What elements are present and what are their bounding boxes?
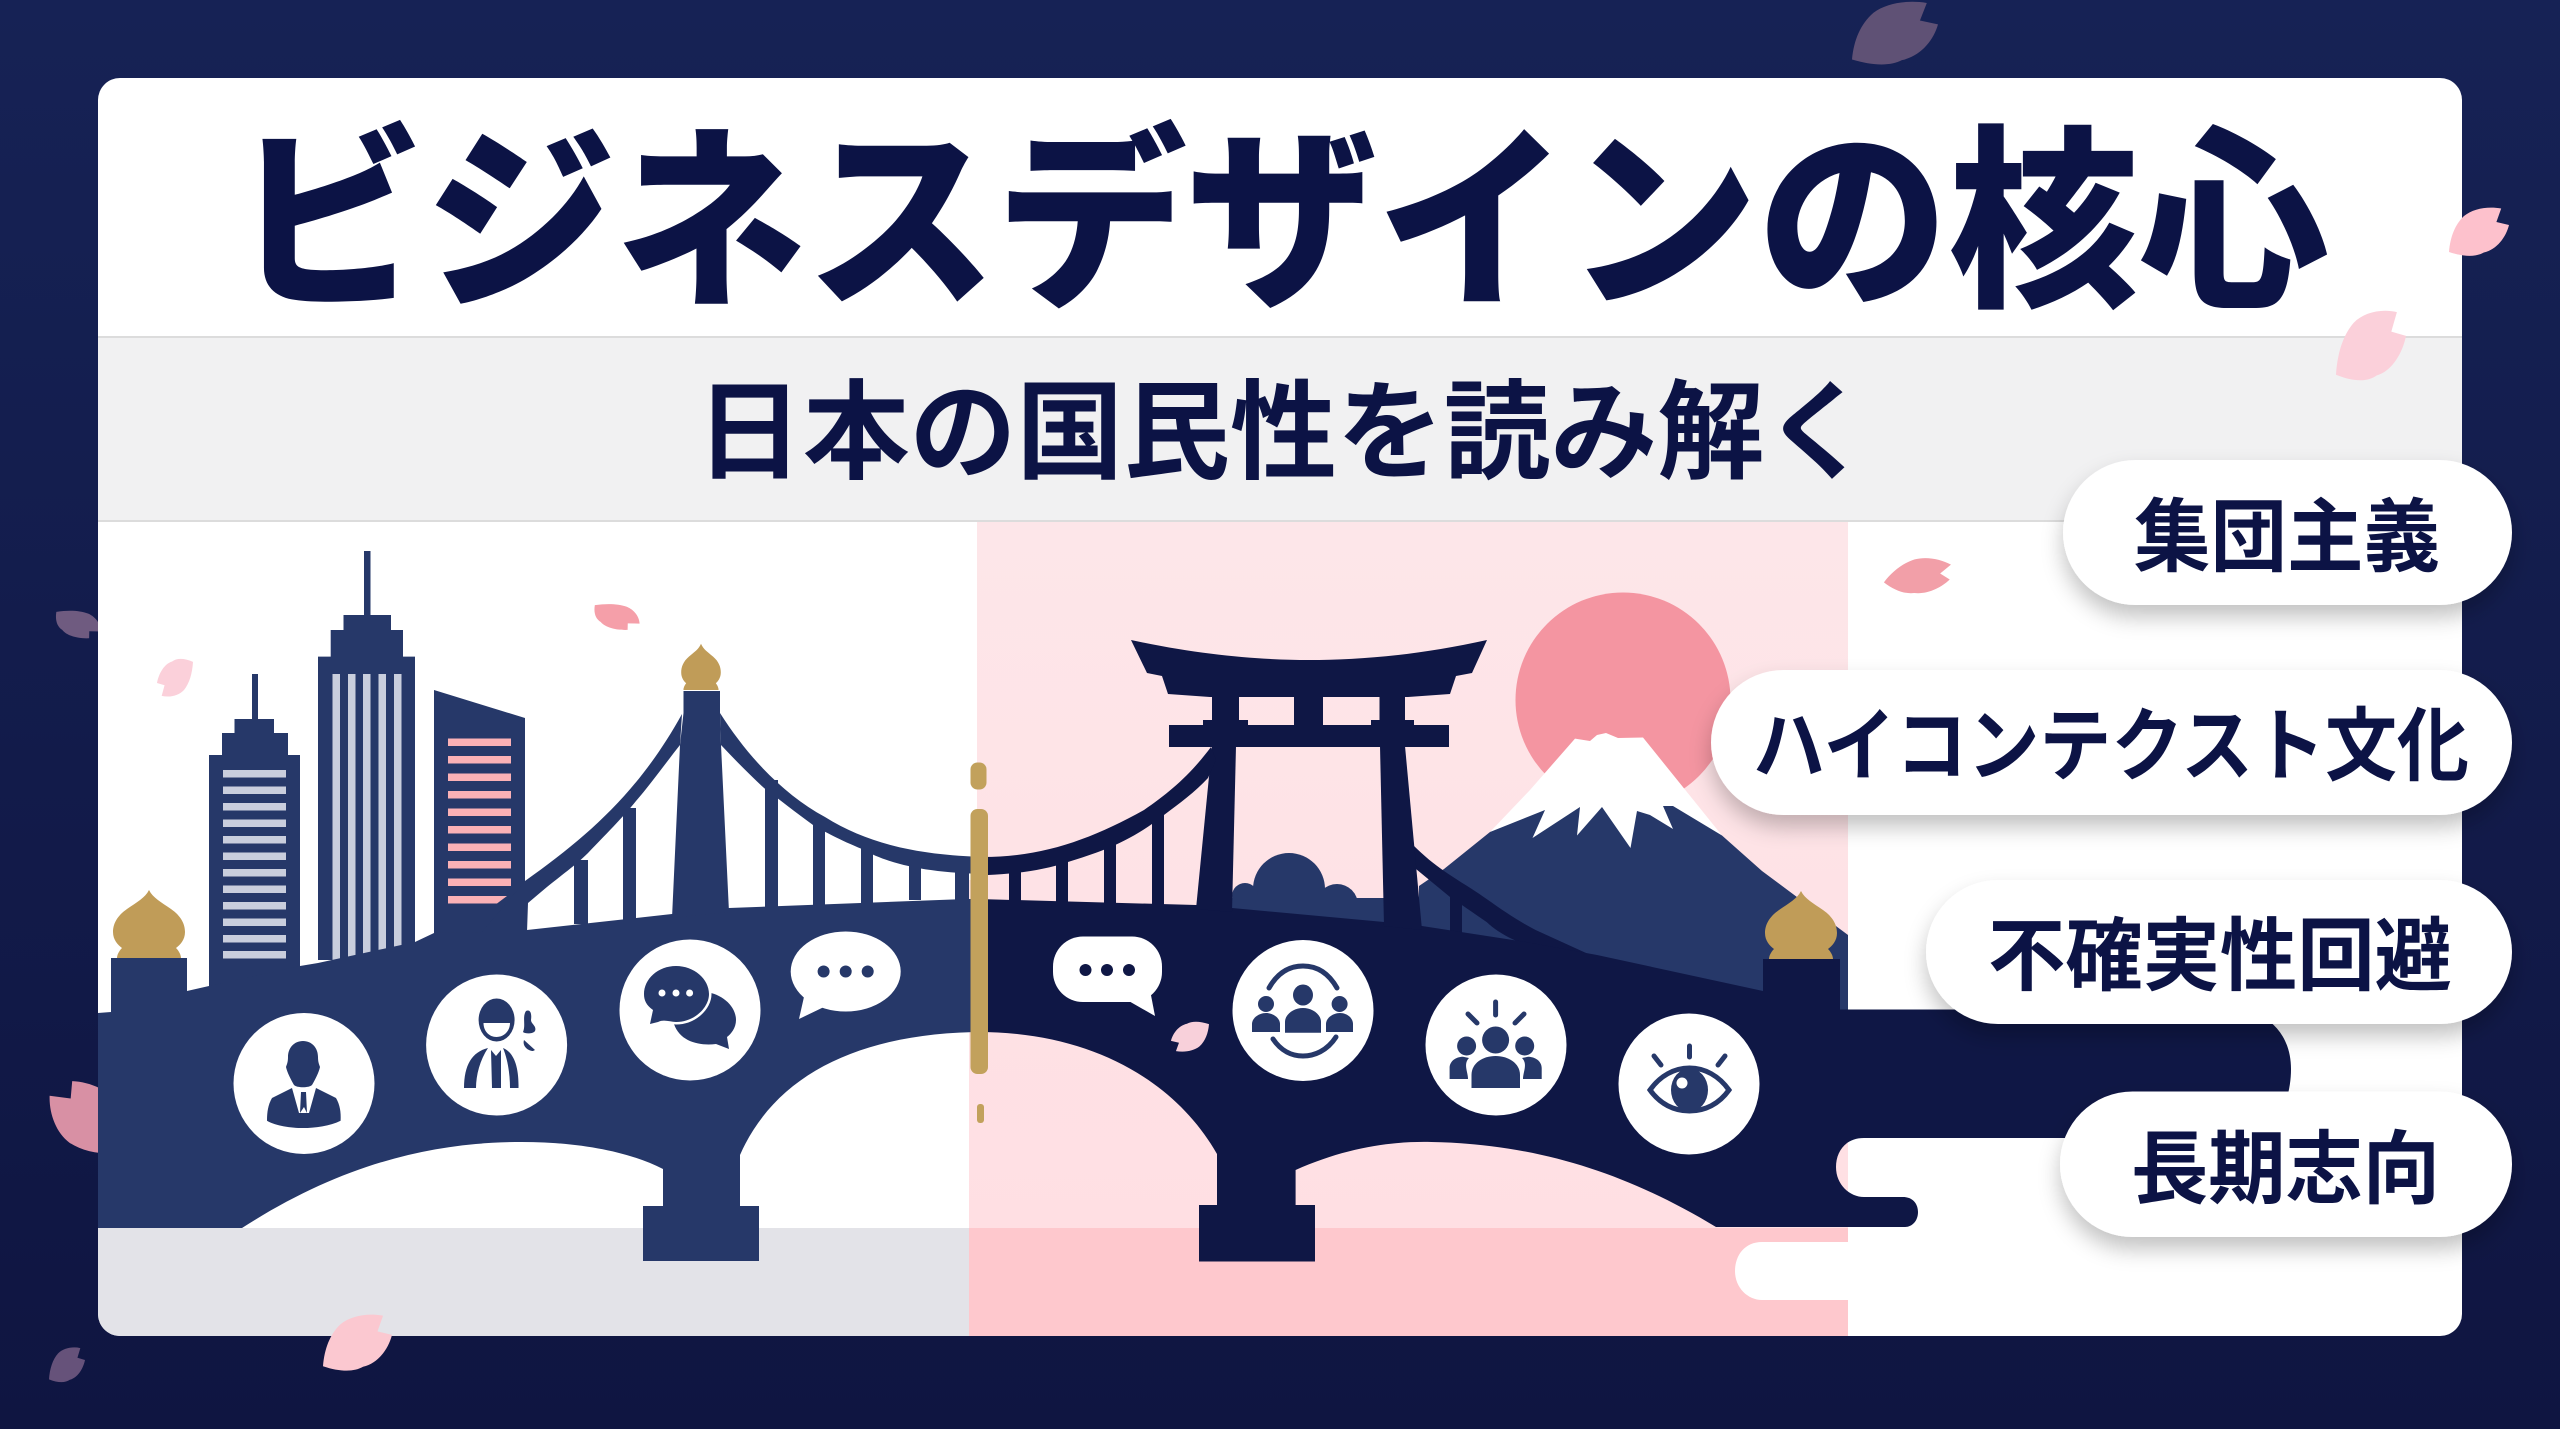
icon: speaking person <box>426 974 567 1116</box>
keyword pill: long-term orientation <box>2060 1092 2512 1237</box>
hangers right <box>1009 815 1164 907</box>
icon: conversation bubbles <box>620 940 760 1080</box>
building: right slanted tower <box>434 690 525 940</box>
keyword pill: uncertainty avoidance <box>1926 880 2512 1024</box>
keyword pill: collectivism <box>2063 460 2512 605</box>
snow cap <box>1490 733 1722 848</box>
icon: group harmony <box>1232 940 1374 1081</box>
main cable right of tower <box>720 713 985 874</box>
building: left tower <box>209 674 300 990</box>
skyline: office towers <box>209 551 525 990</box>
lower right cable <box>1413 845 1597 958</box>
torii gate <box>1131 640 1487 930</box>
building: tall center tower <box>318 551 415 960</box>
icon: business person <box>234 1013 374 1154</box>
pink ground <box>969 1228 1848 1336</box>
pink Japan panel <box>969 522 1848 1228</box>
bridge finials <box>113 644 1837 959</box>
icon: speech bubble left <box>791 932 901 1019</box>
hanger right of torii <box>1450 895 1462 933</box>
illustration panels <box>98 336 2462 1336</box>
icon: speech bubble right <box>1053 936 1162 1016</box>
icon: group attention <box>1426 974 1566 1116</box>
bridge deck right with cloud tail <box>978 899 2291 1262</box>
subtitle: 日本の国民性を読み解く <box>696 372 1871 493</box>
keyword pill: long-term orientation: 長期志向 <box>2131 1125 2440 1214</box>
bridge tower left <box>672 691 729 918</box>
keyword pill: high-context culture <box>1711 670 2512 815</box>
tower finial <box>681 644 721 690</box>
distant trees <box>1232 853 1384 928</box>
mountain body <box>1419 760 1848 1012</box>
grey ground <box>98 1228 969 1336</box>
title: ビジネスデザインの核心 <box>235 114 2329 333</box>
icon: watching eye <box>1618 1014 1760 1154</box>
keyword pill: high-context culture: ハイコンテクスト文化 <box>1753 702 2469 791</box>
bridge deck left <box>98 899 985 1261</box>
main cable left of tower <box>482 714 682 932</box>
petals behind card <box>46 2 1938 1382</box>
mount fuji with sun <box>1419 592 1848 1012</box>
left bridge half <box>98 691 985 1261</box>
gold center seam <box>970 762 988 1123</box>
petals in front <box>157 208 2509 1371</box>
white cloud on ground <box>1735 1242 1850 1300</box>
keyword pill: collectivism: 集団主義 <box>2134 493 2440 582</box>
right bridge half with torii <box>978 640 2291 1262</box>
left pier finial <box>113 890 185 958</box>
keyword pill: uncertainty avoidance: 不確実性回避 <box>1988 912 2452 1001</box>
main cable left of torii <box>978 747 1216 875</box>
right pier finial <box>1765 891 1837 959</box>
subtitle band background <box>98 337 2462 520</box>
hangers left <box>574 780 969 924</box>
sun <box>1516 592 1730 808</box>
